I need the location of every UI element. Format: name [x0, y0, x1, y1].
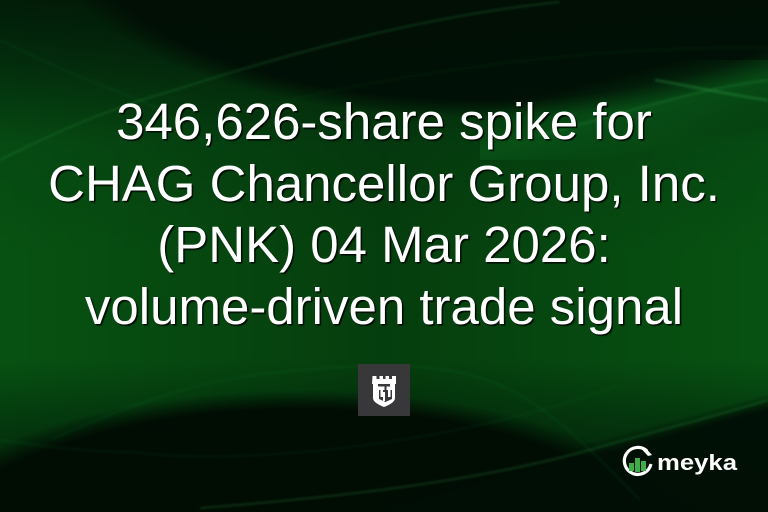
dark hill bottom — [0, 380, 768, 512]
title: (PNK) 04 Mar 2026: — [157, 216, 611, 273]
logo: meyka brand — [622, 446, 738, 476]
icon: company shield logo — [358, 364, 410, 416]
title: CHAG Chancellor Group, Inc. — [48, 154, 720, 212]
title: volume-driven trade signal — [85, 278, 683, 334]
light band right — [480, 60, 768, 160]
icon: meyka ring with bars — [624, 447, 652, 474]
title: 346,626-share spike for — [116, 93, 652, 150]
wordmark: meyka — [657, 450, 738, 475]
dark lens top — [0, 0, 768, 125]
title — [48, 93, 720, 336]
